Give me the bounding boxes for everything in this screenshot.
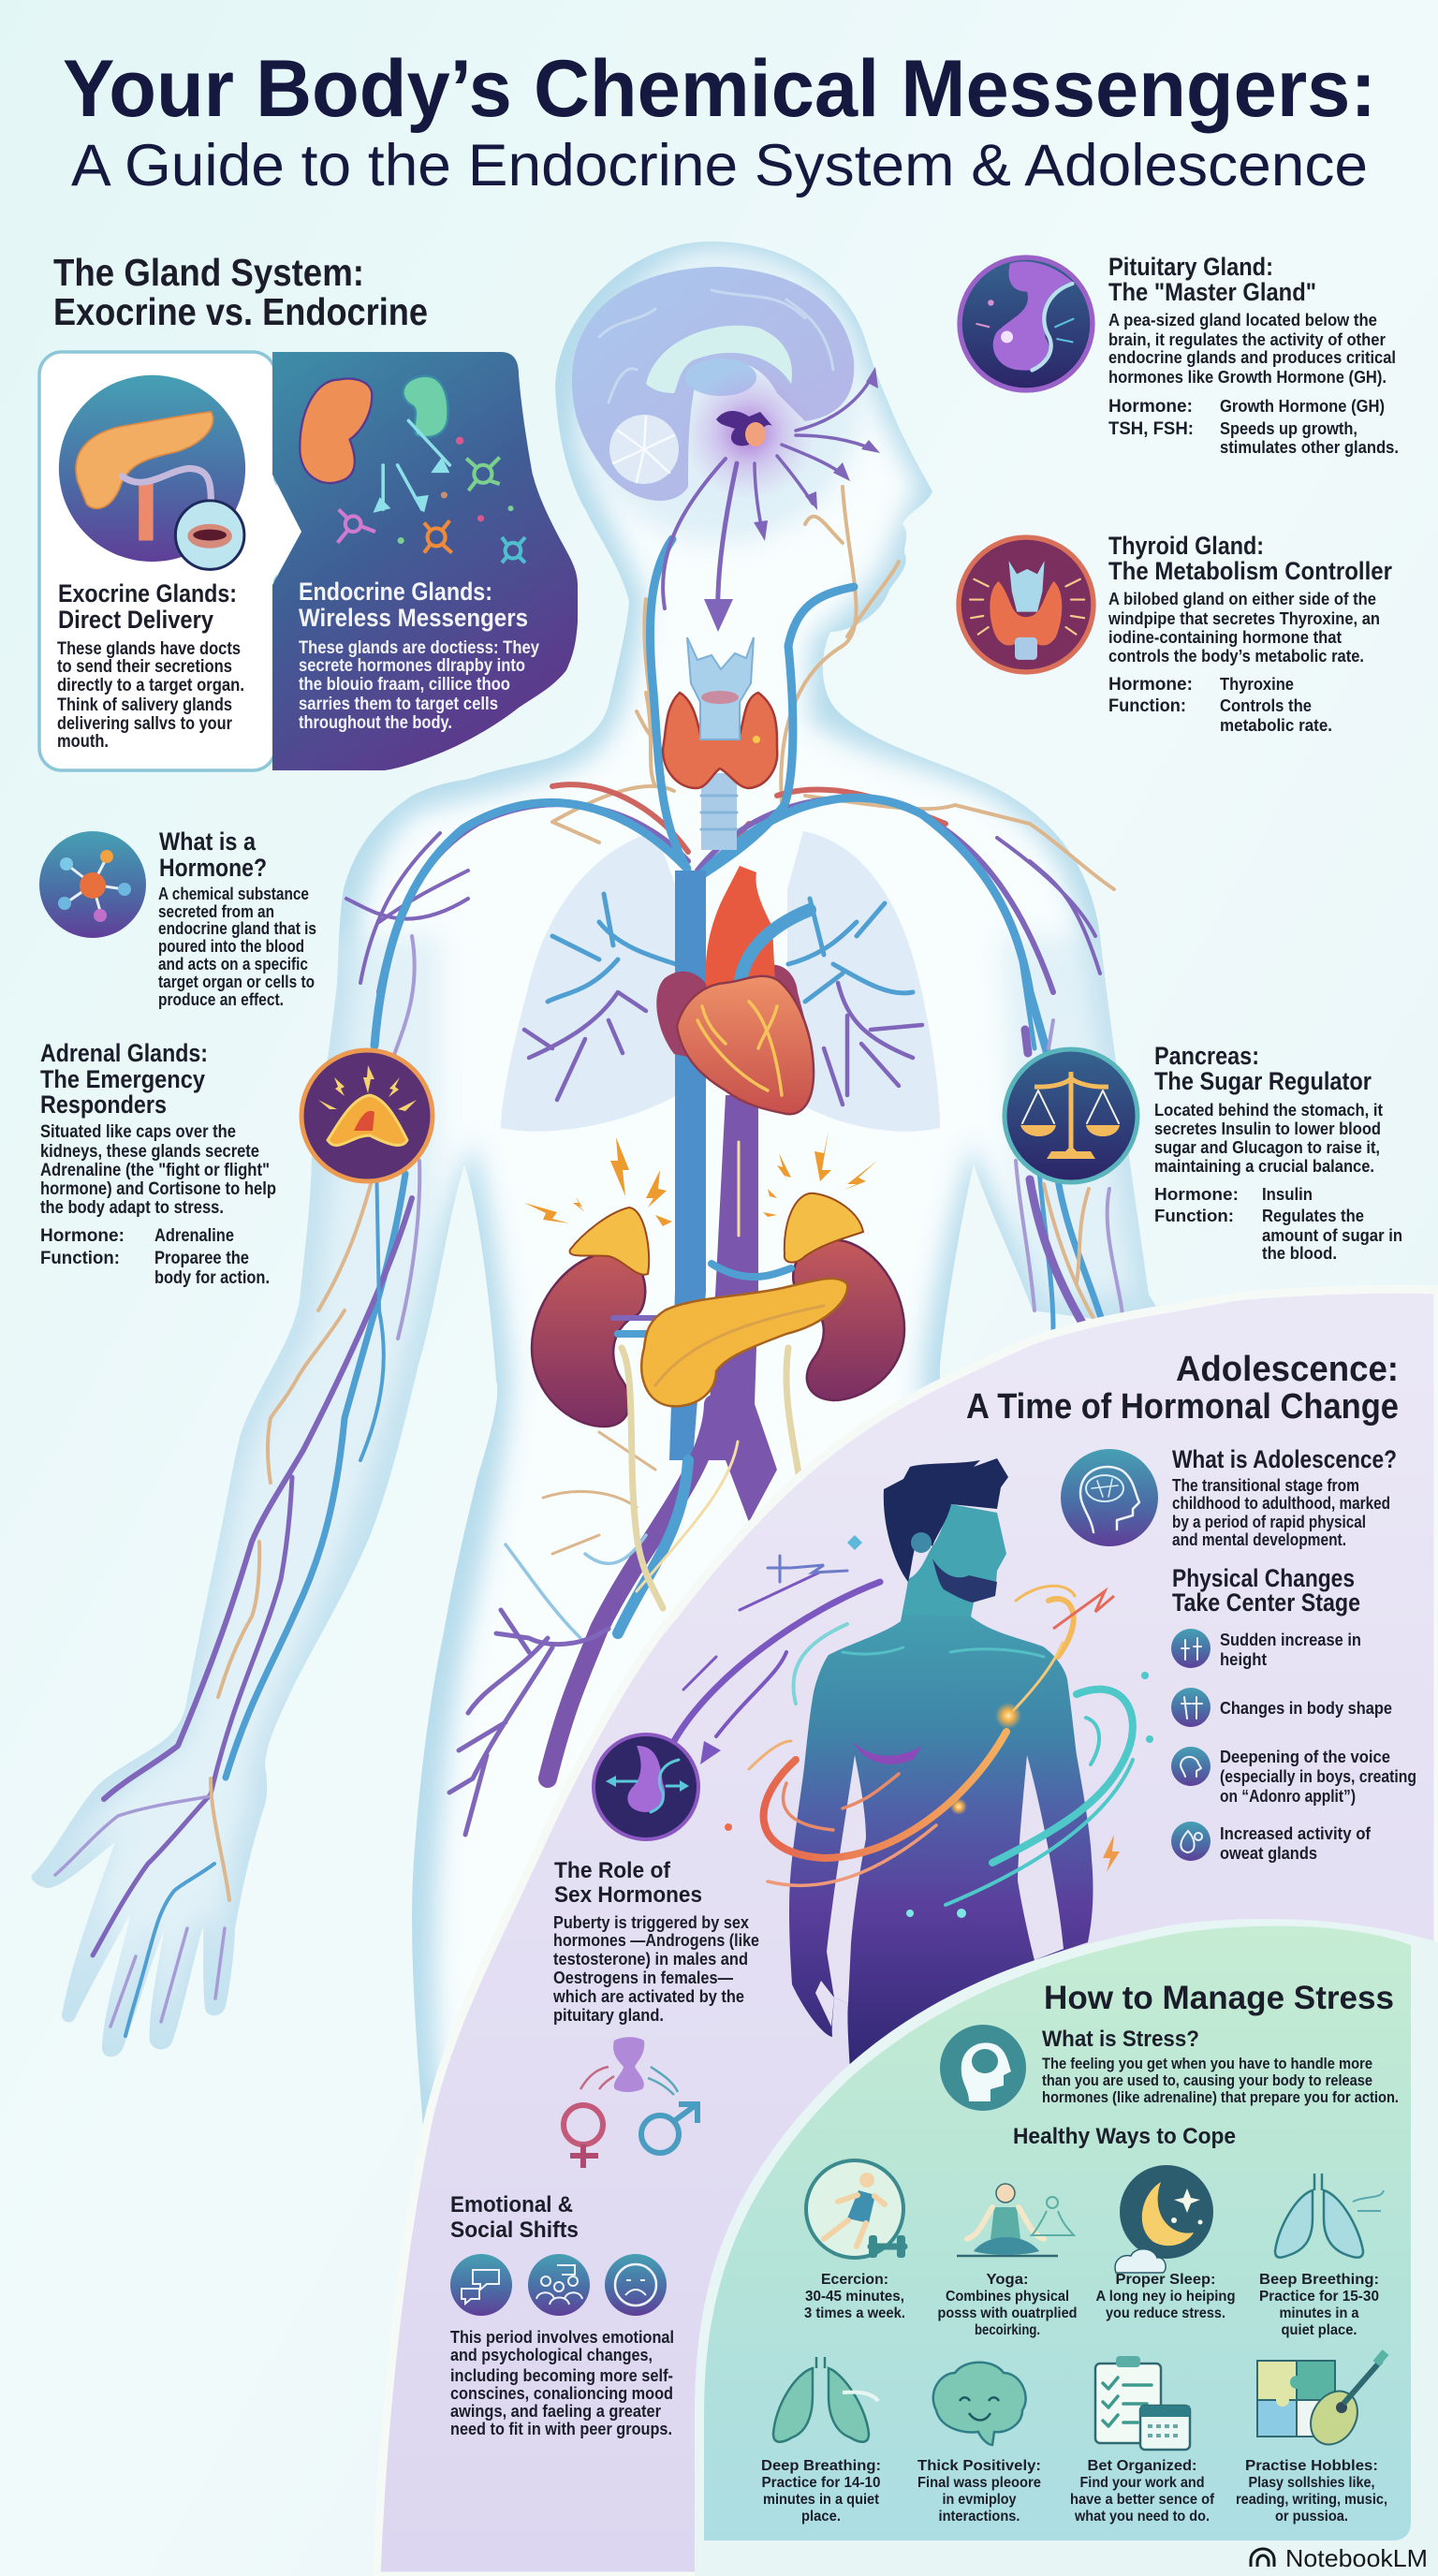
panel: pancreas: Hormone: [1154, 1184, 1239, 1204]
block: role of sex hormones: The Role of [554, 1858, 671, 1883]
icon: sweat [1171, 1822, 1211, 1861]
block: what is adolescence: The transitional stage from [1172, 1475, 1359, 1495]
item: exercise: 30-45 minutes, [805, 2289, 904, 2305]
icon: speech bubbles [450, 2254, 512, 2316]
heading: adolescence [966, 1350, 1399, 1427]
exocrine card: delivering sallvs to your [57, 713, 232, 734]
item: practise hobbies: Practise Hobbles: [1245, 2458, 1378, 2474]
panel: pituitary gland: The "Master Gland" [1108, 278, 1316, 306]
panel: adrenal glands: The Emergency [40, 1065, 205, 1093]
exocrine card [39, 352, 301, 770]
block: role of sex hormones: Sex Hormones [554, 1882, 702, 1908]
illustration: adolescent figure [674, 1458, 1153, 2083]
block: what is stress: hormones (like adrenaline) that prepare you for action. [1042, 2089, 1399, 2106]
endocrine card: secrete hormones dlrapby into [299, 655, 525, 676]
block: role of sex hormones: Oestrogens in females— [553, 1968, 733, 1987]
endocrine card: These glands are doctiess: They [299, 637, 539, 658]
icon: sad face [605, 2254, 667, 2316]
panel: pituitary gland: stimulates other glands. [1220, 437, 1399, 457]
branding: NotebookLM: NotebookLM [1285, 2544, 1428, 2572]
panel: pituitary gland: Growth Hormone (GH) [1220, 396, 1385, 416]
human body anatomy illustration [0, 242, 1170, 2141]
block: physical changes: Sudden increase in [1220, 1630, 1361, 1649]
panel: pituitary gland: Hormone: [1108, 396, 1193, 417]
item: yoga: Yoga: [987, 2272, 1028, 2288]
panel: adrenal glands: Hormone: [40, 1225, 125, 1246]
panel: thyroid gland: Thyroxine [1220, 674, 1294, 694]
exocrine card: These glands have docts [57, 638, 241, 659]
block: emotional and social shifts: This period involves emotional [450, 2327, 674, 2347]
item: exercise [804, 2160, 905, 2321]
title: Your Body’s Chemical Messengers: [63, 44, 1376, 134]
panel: what is a hormone [39, 827, 316, 1009]
item: get organized: what you need to do. [1074, 2509, 1210, 2525]
body silhouette [0, 242, 1170, 2141]
panel: thyroid gland: Thyroid Gland: [1108, 532, 1264, 560]
panel: adrenal glands: kidneys, these glands secrete [40, 1141, 259, 1162]
panel: adrenal glands [40, 1039, 433, 1288]
item: think positively: Final wass pleoore [917, 2475, 1041, 2491]
icon: adrenal gland [301, 1050, 433, 1181]
pituitary gland with signal arrows [663, 365, 880, 632]
item: exercise: Ecercion: [821, 2272, 888, 2288]
icon: height [1171, 1629, 1211, 1668]
endocrine card: Wireless Messengers [299, 604, 528, 632]
icon: smiling brain [933, 2363, 1026, 2445]
item: proper sleep: A long ney io heiping [1095, 2289, 1236, 2305]
block: physical changes: Deepening of the voice [1220, 1747, 1390, 1766]
panel: how to manage stress [695, 1919, 1438, 2576]
panel: adrenal glands: Adrenaline (the "fight or flight" [40, 1160, 270, 1180]
exocrine card: mouth. [57, 731, 109, 752]
heading: adolescence: Adolescence: [1176, 1350, 1399, 1389]
panel: what is a hormone: target organ or cells to [158, 972, 315, 991]
exocrine card: Think of salivery glands [57, 695, 232, 715]
panel: what is a hormone: secreted from an [158, 901, 274, 921]
panel: pituitary gland: endocrine glands and produces critical [1108, 347, 1396, 367]
item: beep breathing [1259, 2174, 1384, 2338]
item: practise hobbies: or pussioa. [1275, 2509, 1348, 2525]
adrenal glands and pancreas [524, 1131, 877, 1406]
block: role of sex hormones [552, 1734, 759, 2025]
block: physical changes [1171, 1564, 1416, 1863]
block: role of sex hormones: hormones —Androgens (like [553, 1930, 759, 1950]
panel: adrenal glands: Adrenal Glands: [40, 1039, 208, 1067]
item: deep breathing: place. [801, 2509, 841, 2525]
title [63, 44, 1376, 198]
panel: thyroid gland: The Metabolism Controller [1108, 557, 1392, 585]
item: proper sleep: Proper Sleep: [1116, 2272, 1215, 2288]
panel: pancreas: secretes Insulin to lower blood [1154, 1119, 1381, 1138]
panel: how to manage stress: Healthy Ways to Cope [1013, 2124, 1236, 2149]
panel: adolescence [376, 1289, 1438, 2576]
block: what is adolescence [1061, 1445, 1397, 1549]
item: yoga: becoirking. [975, 2322, 1040, 2338]
thyroid and trachea [663, 637, 777, 850]
block: emotional and social shifts: including becoming more self- [450, 2365, 673, 2385]
panel: pituitary gland [960, 253, 1399, 457]
panel: what is a hormone: A chemical substance [158, 884, 309, 903]
block: what is adolescence: childhood to adulthood, marked [1172, 1493, 1390, 1513]
panel: pituitary gland: TSH, FSH: [1108, 418, 1194, 439]
icon: meditating figure [957, 2184, 1074, 2256]
panel: pituitary gland: Speeds up growth, [1220, 418, 1357, 438]
brain [572, 267, 854, 501]
block: physical changes: Changes in body shape [1220, 1698, 1392, 1718]
panel: pancreas [1005, 1042, 1402, 1263]
panel: adrenal glands: Adrenaline [154, 1225, 234, 1246]
lungs [501, 831, 940, 1132]
panel: pancreas: maintaining a crucial balance. [1154, 1156, 1374, 1176]
item: beep breathing: quiet place. [1281, 2322, 1357, 2338]
icon: moon and stars [1115, 2165, 1213, 2273]
item: practise hobbies [1236, 2352, 1387, 2525]
heading: gland system: Exocrine vs. Endocrine [53, 290, 428, 333]
item: practise hobbies: Plasy sollshies like, [1249, 2475, 1374, 2491]
icon: brain in head [1061, 1449, 1158, 1546]
endocrine card: Endocrine Glands: [299, 578, 492, 606]
panel: pancreas: Located behind the stomach, it [1154, 1100, 1383, 1120]
panel: pituitary gland: A pea-sized gland located below the [1108, 310, 1377, 329]
icon: runner and dumbbell [806, 2160, 905, 2258]
panel: pancreas: Insulin [1262, 1184, 1313, 1204]
panel: what is a hormone: What is a [159, 827, 256, 856]
exocrine card: Exocrine Glands: [58, 579, 237, 607]
motion arrows [674, 1582, 880, 1741]
item: think positively: interactions. [938, 2509, 1020, 2525]
panel: pancreas: sugar and Glucagon to raise it, [1154, 1137, 1380, 1157]
panel: thyroid gland [959, 532, 1392, 735]
panel: pancreas: amount of sugar in [1262, 1225, 1402, 1245]
block: emotional and social shifts: Emotional & [450, 2192, 573, 2217]
panel: thyroid gland: A bilobed gland on either side of the [1108, 589, 1376, 608]
item: beep breathing: Beep Breething: [1259, 2272, 1379, 2288]
item: yoga: posss with ouatrplied [938, 2305, 1077, 2321]
icon: group of people [528, 2254, 590, 2316]
panel: adrenal glands: the body adapt to stress. [40, 1197, 224, 1218]
panel: exocrine vs endocrine gland system [39, 251, 578, 770]
hormonal energy swirls [674, 1556, 1133, 1905]
icon: activated pituitary [594, 1734, 698, 1839]
arteries and veins [55, 487, 1123, 2036]
item: get organized [1070, 2356, 1215, 2525]
block: what is adolescence: What is Adolescence? [1172, 1445, 1397, 1473]
item: proper sleep: you reduce stress. [1106, 2305, 1225, 2321]
panel: adrenal glands: Proparee the [154, 1248, 249, 1268]
icon: hormone molecule [39, 831, 146, 938]
block: what is adolescence: by a period of rapid physical [1172, 1512, 1366, 1531]
block: emotional and social shifts: conscines, conalioncing mood [450, 2383, 673, 2403]
item: deep breathing [761, 2357, 881, 2525]
block: physical changes: Increased activity of [1220, 1823, 1372, 1843]
panel: pituitary gland: Pituitary Gland: [1108, 253, 1273, 281]
item: practise hobbies: reading, writing, music, [1236, 2492, 1387, 2508]
panel: adrenal glands: Function: [40, 1248, 120, 1268]
item: think positively [917, 2363, 1041, 2525]
item: think positively: in evmiploy [942, 2492, 1017, 2508]
panel: pancreas: Pancreas: [1154, 1042, 1259, 1070]
icon: puzzle and guitar [1257, 2352, 1386, 2452]
panel: pancreas: the blood. [1262, 1243, 1337, 1263]
icon: thyroid [959, 537, 1093, 672]
block: physical changes: Take Center Stage [1172, 1588, 1360, 1617]
icon: head with brain [940, 2025, 1026, 2111]
panel: what is a hormone: endocrine gland that is [158, 918, 316, 938]
block: physical changes: Physical Changes [1172, 1564, 1355, 1592]
endocrine card [272, 352, 578, 770]
kidneys [532, 1240, 904, 1608]
panel: thyroid gland: controls the body’s metabolic rate. [1108, 646, 1364, 666]
panel: pancreas: Regulates the [1262, 1206, 1364, 1225]
item: think positively: Thick Positively: [917, 2458, 1041, 2474]
panel: pituitary gland: hormones like Growth Hormone (GH). [1108, 367, 1387, 387]
heart [656, 866, 814, 1114]
block: emotional and social shifts: Social Shifts [450, 2217, 579, 2243]
panel: thyroid gland: metabolic rate. [1220, 715, 1332, 735]
block: physical changes: on “Adonro applit”) [1220, 1786, 1356, 1806]
panel: thyroid gland: iodine-containing hormone that [1108, 627, 1342, 647]
endocrine card: throughout the body. [299, 712, 452, 733]
block: physical changes: oweat glands [1220, 1843, 1317, 1863]
item: proper sleep [1095, 2165, 1236, 2321]
item: get organized: have a better sence of [1070, 2492, 1215, 2508]
block: emotional and social shifts: and psychological changes, [450, 2345, 653, 2364]
icon: voice [1171, 1747, 1211, 1786]
block: what is stress: than you are used to, causing your body to release [1042, 2072, 1372, 2089]
panel: what is a hormone: and acts on a specific [158, 954, 308, 973]
title: A Guide to the Endocrine System & Adolescence [71, 133, 1368, 198]
block: role of sex hormones: which are activated by the [552, 1986, 744, 2006]
exocrine card: to send their secretions [57, 656, 232, 677]
item: get organized: Bet Organized: [1088, 2458, 1196, 2474]
heading: gland system: The Gland System: [53, 251, 364, 294]
block: physical changes: height [1220, 1649, 1267, 1669]
panel: thyroid gland: windpipe that secretes Thyroxine, an [1108, 608, 1380, 628]
block: emotional and social shifts [450, 2192, 674, 2438]
panel: what is a hormone: Hormone? [159, 854, 267, 882]
icon: lungs with air [1275, 2174, 1384, 2258]
item: yoga: Combines physical [946, 2289, 1069, 2305]
icon: pancreas duct to mouth [59, 375, 245, 569]
icon: gender symbols [564, 2037, 697, 2168]
panel: pancreas: Function: [1154, 1206, 1234, 1225]
icon: green lungs [773, 2357, 878, 2442]
item: deep breathing: Practice for 14-10 [762, 2475, 880, 2491]
panel: thyroid gland: Controls the [1220, 695, 1312, 715]
block: emotional and social shifts: need to fit in with peer groups. [450, 2419, 672, 2438]
block: emotional and social shifts: awings, and faeling a greater [450, 2401, 661, 2421]
endocrine card: the blouio fraam, cillice thoo [299, 674, 510, 695]
exocrine card: directly to a target organ. [57, 675, 244, 695]
item: beep breathing: Practice for 15-30 [1259, 2289, 1379, 2305]
icon: body shape [1171, 1688, 1211, 1727]
panel: thyroid gland: Hormone: [1108, 674, 1193, 695]
panel: adrenal glands: Situated like caps over the [40, 1121, 236, 1142]
icon: glands releasing hormones [300, 376, 525, 563]
icon: balance scales [1005, 1049, 1137, 1182]
block: what is stress: The feeling you get when you have to handle more [1042, 2056, 1372, 2072]
item: exercise: 3 times a week. [804, 2305, 905, 2321]
panel: thyroid gland: Function: [1108, 695, 1186, 716]
item: yoga [938, 2184, 1077, 2338]
item: beep breathing: minutes in a [1279, 2305, 1359, 2321]
item: deep breathing: Deep Breathing: [761, 2458, 881, 2474]
panel: adrenal glands: body for action. [154, 1267, 270, 1288]
panel: adrenal glands: Responders [40, 1090, 167, 1119]
item: get organized: Find your work and [1080, 2475, 1204, 2491]
exocrine card: Direct Delivery [58, 606, 213, 634]
block: what is stress [940, 2025, 1399, 2111]
panel: how to manage stress: How to Manage Stress [1044, 1980, 1394, 2016]
panel: pituitary gland: brain, it regulates the activity of other [1108, 329, 1386, 349]
heading: adolescence: A Time of Hormonal Change [966, 1387, 1399, 1427]
panel: what is a hormone: produce an effect. [158, 989, 284, 1009]
block: what is adolescence: and mental development. [1172, 1530, 1346, 1549]
block: role of sex hormones: pituitary gland. [553, 2005, 664, 2025]
block: what is stress: What is Stress? [1042, 2027, 1199, 2052]
icon: pituitary [960, 257, 1093, 390]
icon: clipboard and calendar [1095, 2356, 1190, 2450]
panel: adrenal glands: hormone) and Cortisone to help [40, 1178, 276, 1199]
panel: pancreas: The Sugar Regulator [1154, 1067, 1372, 1095]
block: role of sex hormones: Puberty is triggered by sex [553, 1912, 750, 1932]
heading: gland system [53, 251, 428, 333]
block: role of sex hormones: testosterone) in males and [553, 1949, 748, 1969]
endocrine card: sarries them to target cells [299, 694, 498, 714]
item: deep breathing: minutes in a quiet [763, 2492, 879, 2508]
panel: what is a hormone: poured into the blood [158, 936, 304, 956]
